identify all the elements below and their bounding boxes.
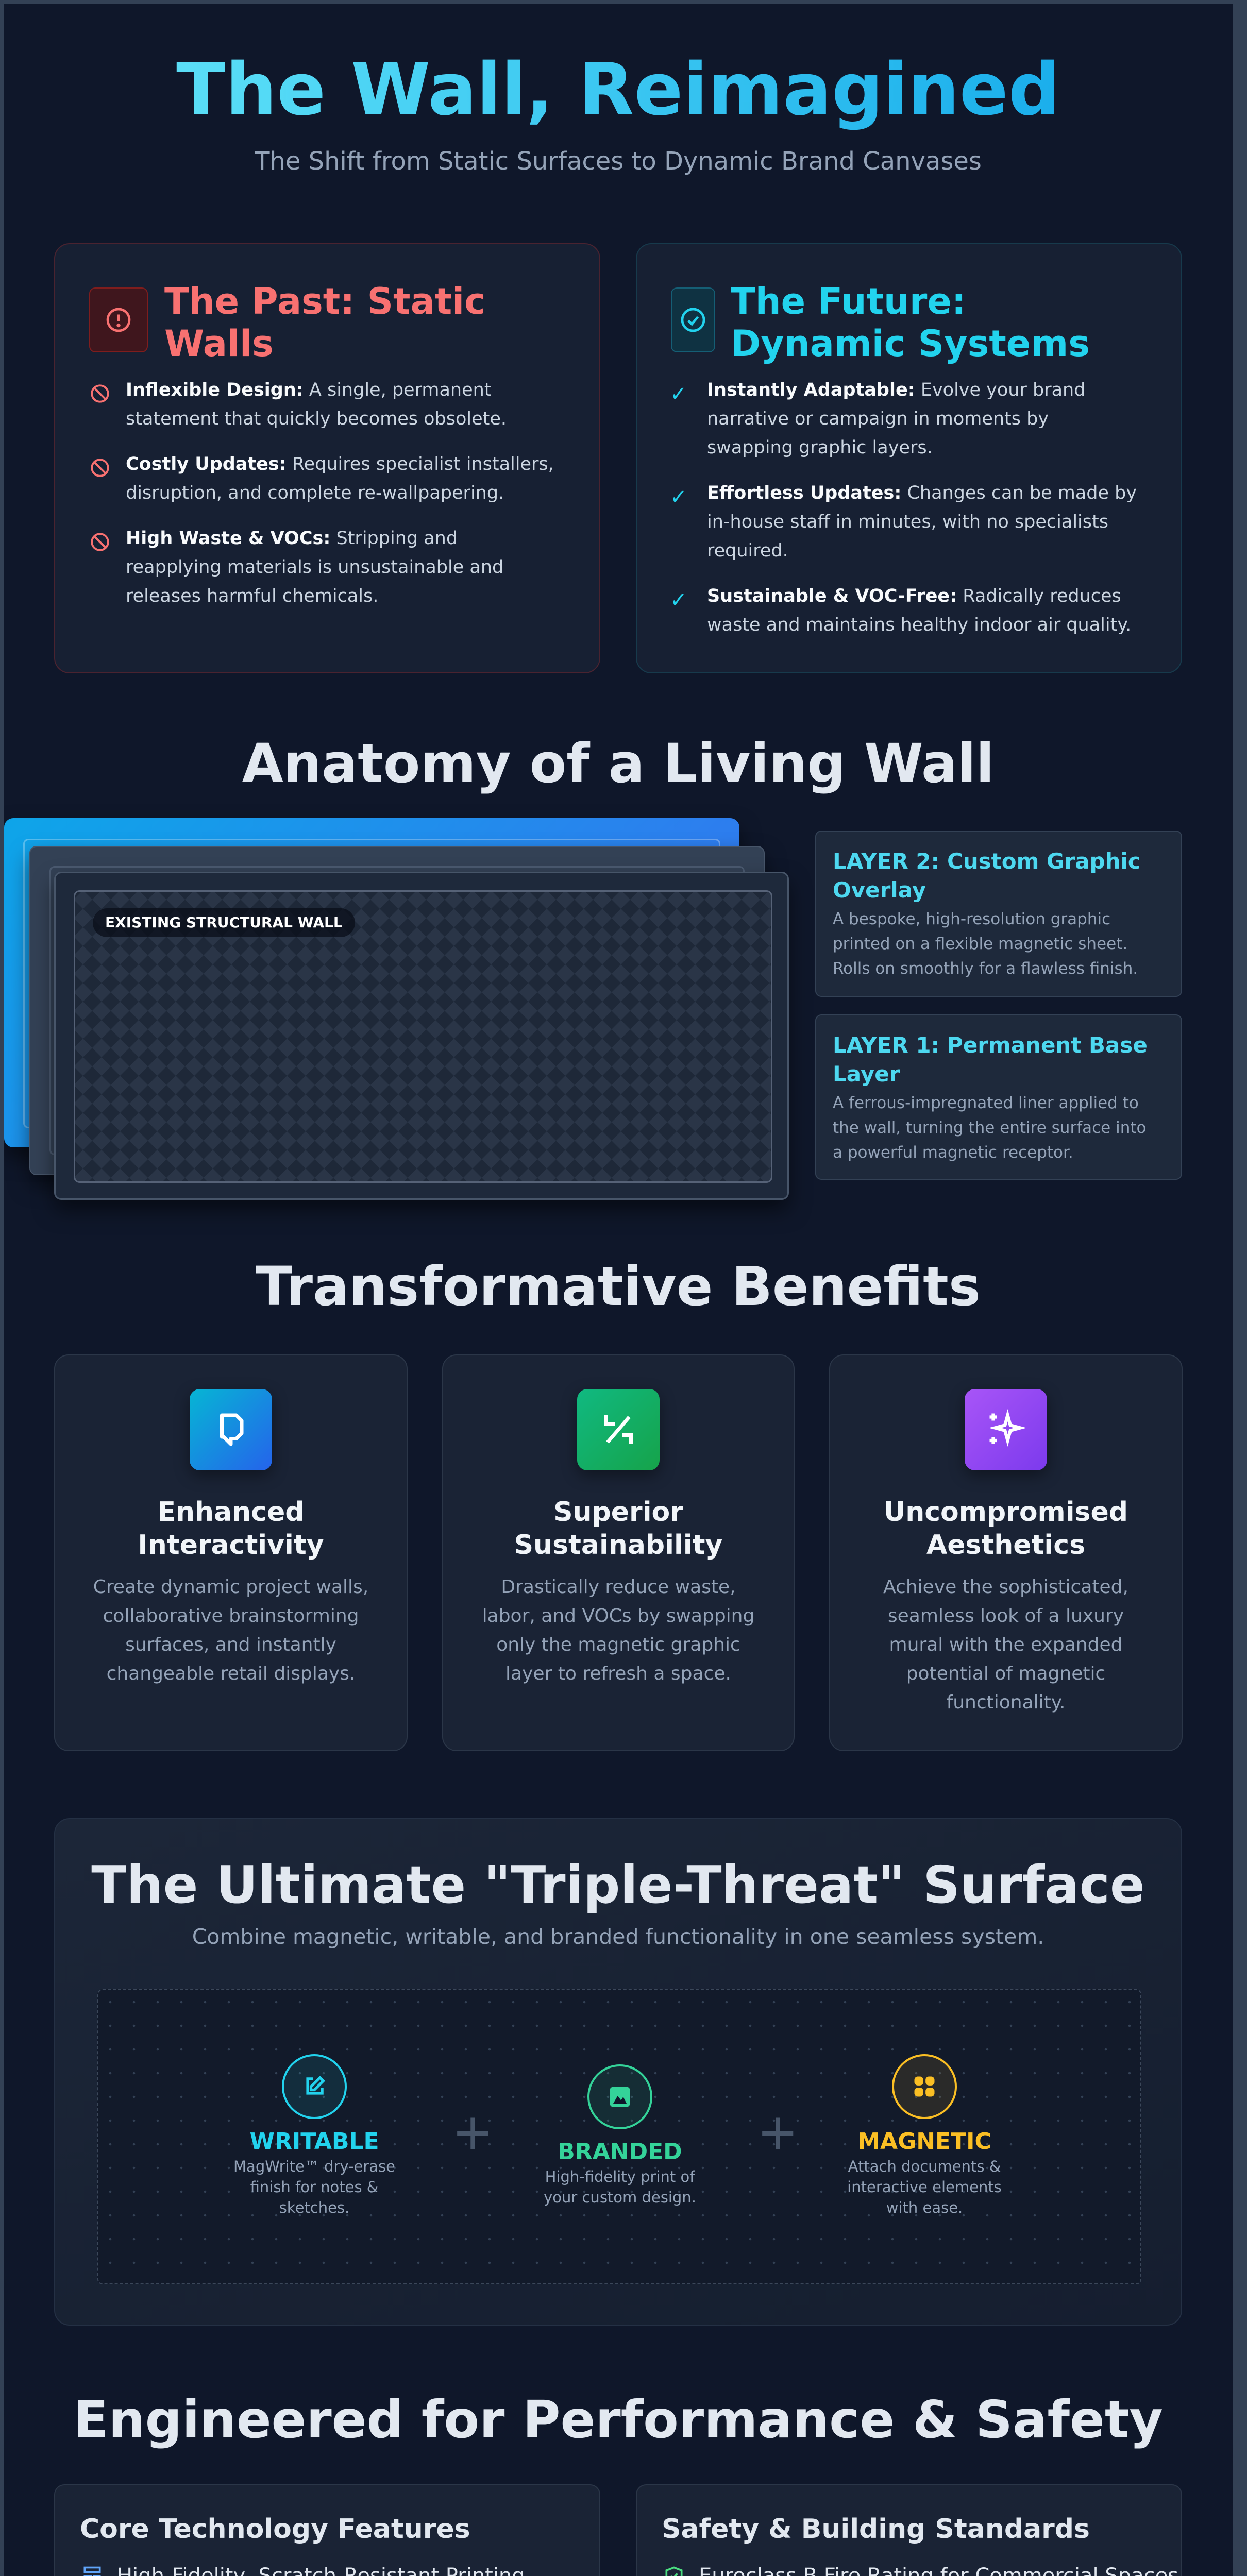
- card: sustainability: layer to refresh a space.: [505, 1663, 731, 1684]
- card: aesthetics: potential of magnetic: [906, 1663, 1105, 1684]
- card: aesthetics: seamless look of a luxury: [888, 1605, 1124, 1626]
- card: core technology: [54, 2484, 600, 2576]
- feature: magnetic: MAGNETIC: [857, 2128, 991, 2155]
- bullet list: required.: [707, 540, 788, 561]
- bullet list: Sustainable & VOC-Free: Radically reduces: [707, 586, 1121, 606]
- feature: writable: [233, 2054, 395, 2216]
- card: layer 1: Layer: [833, 1061, 900, 1087]
- bullet list: High Waste & VOCs: Stripping and: [126, 528, 458, 549]
- subtitle: Combine magnetic, writable, and branded functionality in one seamless system.: [192, 1924, 1044, 1949]
- bullet list: Costly Updates: Requires specialist installers,: [126, 454, 554, 474]
- heading: The Ultimate "Triple-Threat" Surface: [91, 1855, 1145, 1915]
- card: sustainability: only the magnetic graphic: [496, 1634, 740, 1655]
- label: existing structural wall: [93, 908, 355, 937]
- icon: sparkles: [965, 1389, 1047, 1470]
- feature: branded: BRANDED: [558, 2139, 682, 2165]
- heading: benefits: Transformative Benefits: [256, 1255, 981, 1318]
- bullet list: releases harmful chemicals.: [126, 586, 378, 606]
- card: interactivity: Enhanced: [158, 1497, 304, 1528]
- heading: [164, 280, 486, 365]
- bullet list: statement that quickly becomes obsolete.: [126, 409, 507, 429]
- card: layer 1: A ferrous-impregnated liner applied to: [833, 1094, 1139, 1112]
- bullet list: [670, 380, 1137, 635]
- card: aesthetics: mural with the expanded: [889, 1634, 1122, 1655]
- card: aesthetics: Aesthetics: [926, 1530, 1085, 1561]
- layer: structural wall: [54, 872, 789, 1200]
- card: sustainability: Drastically reduce waste,: [501, 1577, 736, 1598]
- bullet list: ✓: [670, 485, 687, 509]
- subtitle: The Shift from Static Surfaces to Dynamic Brand Canvases: [255, 147, 982, 176]
- bullet list: [91, 380, 554, 606]
- card: aesthetics: [829, 1354, 1183, 1751]
- card: interactivity: changeable retail displays.: [107, 1663, 355, 1684]
- card: core technology: Core Technology Features: [80, 2514, 470, 2545]
- bullet list: disruption, and complete re-wallpapering.: [126, 483, 504, 503]
- icon: check circle: [671, 287, 715, 352]
- label: existing structural wall: EXISTING STRUCTURAL WALL: [105, 914, 343, 931]
- feature: branded: High-fidelity print of: [545, 2168, 695, 2185]
- card: layer 1: the wall, turning the entire surface into: [833, 1118, 1146, 1137]
- bullet list: narrative or campaign in moments by: [707, 409, 1049, 429]
- card: aesthetics: Achieve the sophisticated,: [883, 1577, 1128, 1598]
- bullet list: waste and maintains healthy indoor air quality.: [707, 615, 1131, 635]
- card: interactivity: collaborative brainstorming: [103, 1605, 359, 1626]
- card: aesthetics: Uncompromised: [884, 1497, 1128, 1528]
- card: layer 2: [815, 831, 1182, 997]
- card: layer 2: A bespoke, high-resolution graphic: [833, 910, 1110, 928]
- card: layer 2: LAYER 2: Custom Graphic: [833, 849, 1141, 874]
- feature: branded: [544, 2064, 696, 2206]
- panel: triple threat: [54, 1818, 1182, 2326]
- layer: base liner: [29, 846, 765, 1175]
- card: safety: [636, 2484, 1182, 2576]
- dotted surface: [97, 1989, 1141, 2284]
- card: interactivity: [54, 1354, 408, 1751]
- icon: chat: [190, 1389, 272, 1470]
- card: sustainability: Superior: [553, 1497, 683, 1528]
- feature: writable: sketches.: [279, 2199, 349, 2216]
- bullet list: Instantly Adaptable: Evolve your brand: [707, 380, 1085, 400]
- feature: magnetic: Attach documents &: [848, 2158, 1001, 2175]
- icon: alert: [89, 287, 148, 352]
- icon: plus: +: [757, 2103, 798, 2161]
- panel: the past: [54, 243, 600, 673]
- bullet list: Inflexible Design: A single, permanent: [126, 380, 492, 400]
- feature: writable: WRITABLE: [249, 2128, 379, 2155]
- diagram: wall layers: [4, 818, 792, 1213]
- heading: The Future:: [731, 280, 966, 323]
- card: aesthetics: functionality.: [947, 1692, 1065, 1713]
- card: layer 1: LAYER 1: Permanent Base: [833, 1032, 1148, 1058]
- heading: Dynamic Systems: [731, 323, 1090, 365]
- heading: engineered: Engineered for Performance & Safety: [73, 2389, 1163, 2450]
- icon: percent: [577, 1389, 660, 1470]
- layer: graphic overlay: [4, 818, 739, 1147]
- heading: [731, 280, 1090, 365]
- panel: the future: [636, 243, 1182, 673]
- feature: magnetic: with ease.: [886, 2199, 963, 2216]
- feature: magnetic: interactive elements: [847, 2178, 1002, 2196]
- card: layer 2: Rolls on smoothly for a flawless finish.: [833, 959, 1138, 978]
- bullet list: in-house staff in minutes, with no specialists: [707, 512, 1108, 532]
- bullet list: reapplying materials is unsustainable and: [126, 557, 503, 578]
- bullet list: ✓: [670, 382, 687, 406]
- card: interactivity: surfaces, and instantly: [125, 1634, 336, 1655]
- card: layer 2: printed on a flexible magnetic sheet.: [833, 935, 1127, 953]
- title: The Wall, Reimagined: [176, 48, 1060, 132]
- heading: anatomy: Anatomy of a Living Wall: [242, 732, 995, 795]
- card: sustainability: [442, 1354, 795, 1751]
- card: layer 1: a powerful magnetic receptor.: [833, 1143, 1073, 1162]
- bullet list: ✓: [670, 588, 687, 612]
- card: safety: Safety & Building Standards: [662, 2514, 1090, 2545]
- card: sustainability: Sustainability: [514, 1530, 722, 1561]
- feature: magnetic: [847, 2054, 1002, 2216]
- card: layer 1: [815, 1014, 1182, 1180]
- card: sustainability: labor, and VOCs by swapping: [482, 1605, 754, 1626]
- card: interactivity: Create dynamic project walls,: [93, 1577, 368, 1598]
- bullet list: swapping graphic layers.: [707, 437, 933, 458]
- feature: writable: finish for notes &: [250, 2178, 378, 2196]
- feature: writable: MagWrite™ dry-erase: [233, 2158, 395, 2175]
- card: layer 2: Overlay: [833, 877, 926, 903]
- bullet list: Effortless Updates: Changes can be made by: [707, 483, 1137, 503]
- card: interactivity: Interactivity: [138, 1530, 324, 1561]
- feature: branded: your custom design.: [544, 2189, 696, 2206]
- icon: plus: +: [452, 2103, 493, 2161]
- heading: Walls: [164, 323, 274, 365]
- heading: The Past: Static: [164, 280, 486, 323]
